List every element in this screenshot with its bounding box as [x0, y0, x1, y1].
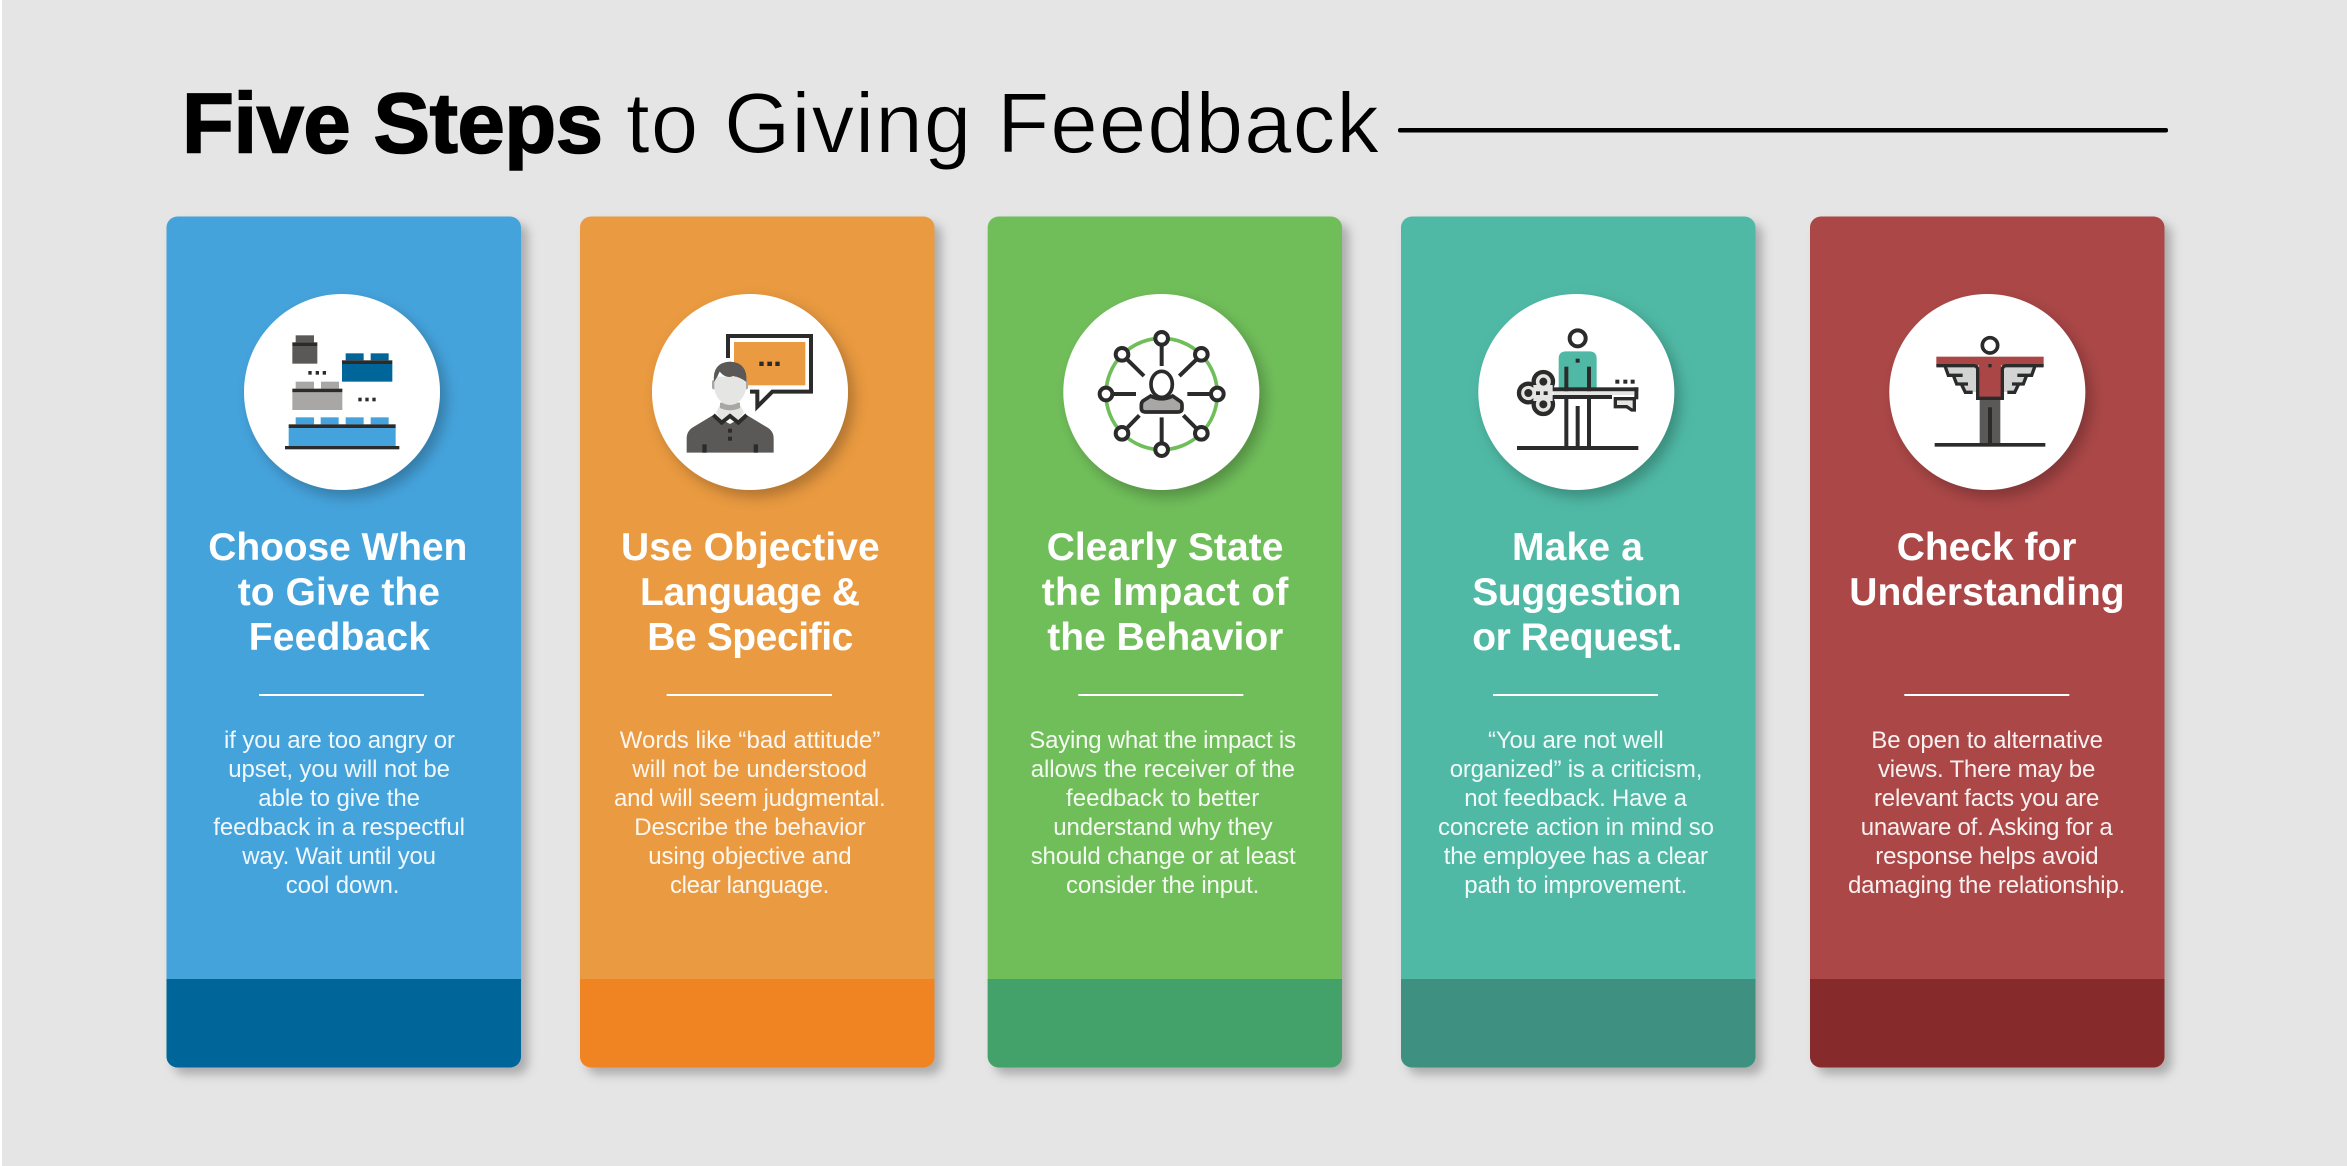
panel: state the impact: [988, 216, 1342, 1068]
panel: check for understanding: [1810, 216, 2164, 1068]
body text: damaging the relationship.: [1848, 872, 2125, 899]
card footer band: [1401, 979, 1756, 1068]
card background: [988, 216, 1342, 1068]
card footer band: [1810, 979, 2164, 1068]
heading: the Impact of: [1042, 571, 1289, 614]
heading: [621, 526, 880, 659]
card footer band: [580, 979, 934, 1068]
heading: Understanding: [1849, 571, 2125, 614]
body text: will not be understood: [631, 756, 867, 783]
body text: should change or at least: [1031, 843, 1296, 870]
panel: choose when: [166, 216, 521, 1068]
icon: person with speech bubble: [687, 336, 811, 453]
heading: Make a: [1512, 526, 1643, 569]
panel: objective language: [580, 216, 934, 1068]
heading: Language &: [640, 571, 860, 614]
heading: Be Specific: [647, 616, 853, 659]
body text: if you are too angry or: [224, 727, 455, 754]
icon circle: [244, 294, 440, 490]
body text: understand why they: [1053, 814, 1273, 841]
body text: Words like “bad attitude”: [620, 727, 880, 754]
body text: concrete action in mind so: [1438, 814, 1714, 841]
icon: person with wings: [1935, 338, 2045, 447]
body text: [1438, 727, 1714, 899]
heading: [1472, 526, 1682, 659]
heading: Check for: [1897, 526, 2076, 569]
body text: upset, you will not be: [228, 756, 450, 783]
icon circle: [652, 294, 848, 490]
body text: “You are not well: [1488, 727, 1664, 754]
heading: [208, 526, 467, 659]
body text: [213, 727, 465, 899]
body text: views. There may be: [1878, 756, 2095, 783]
card background: [166, 216, 521, 1068]
body text: [614, 727, 886, 899]
body text: [1029, 727, 1296, 899]
body text: unaware of. Asking for a: [1861, 814, 2113, 841]
title: to Giving Feedback: [626, 77, 1380, 172]
body text: using objective and: [648, 843, 852, 870]
body text: organized” is a criticism,: [1450, 756, 1702, 783]
card background: [580, 216, 934, 1068]
card background: [1810, 216, 2164, 1068]
body text: Be open to alternative: [1871, 727, 2103, 754]
heading: Feedback: [249, 616, 430, 659]
body text: cool down.: [286, 872, 399, 899]
heading: Choose When: [208, 526, 467, 569]
body text: Describe the behavior: [634, 814, 866, 841]
body text: able to give the: [258, 785, 420, 812]
panel: suggestion or request: [1401, 216, 1756, 1068]
title: Five Steps: [182, 77, 603, 172]
body text: feedback in a respectful: [213, 814, 465, 841]
icon: building blocks: [285, 335, 399, 449]
heading: [1042, 526, 1289, 659]
icon circle: [1478, 294, 1674, 490]
body text: way. Wait until you: [241, 843, 436, 870]
body text: clear language.: [670, 872, 829, 899]
heading: the Behavior: [1047, 616, 1283, 659]
title: [182, 77, 2168, 172]
heading: Clearly State: [1047, 526, 1283, 569]
card footer band: [166, 979, 521, 1068]
body text: the employee has a clear: [1444, 843, 1708, 870]
body text: consider the input.: [1066, 872, 1259, 899]
body text: [1848, 727, 2125, 899]
icon: person with key: [1517, 330, 1638, 450]
body text: relevant facts you are: [1874, 785, 2099, 812]
heading: or Request.: [1472, 616, 1682, 659]
icon circle: [1889, 294, 2085, 490]
heading: Suggestion: [1472, 571, 1681, 614]
body text: and will seem judgmental.: [614, 785, 886, 812]
heading: Use Objective: [621, 526, 880, 569]
icon: person network: [1100, 332, 1224, 456]
body text: not feedback. Have a: [1464, 785, 1688, 812]
body text: Saying what the impact is: [1029, 727, 1296, 754]
body text: response helps avoid: [1875, 843, 2099, 870]
heading: [1849, 526, 2125, 614]
card background: [1401, 216, 1756, 1068]
body text: allows the receiver of the: [1031, 756, 1295, 783]
body text: path to improvement.: [1464, 872, 1687, 899]
heading: to Give the: [238, 571, 440, 614]
body text: feedback to better: [1066, 785, 1259, 812]
card footer band: [988, 979, 1342, 1068]
icon circle: [1063, 294, 1259, 490]
